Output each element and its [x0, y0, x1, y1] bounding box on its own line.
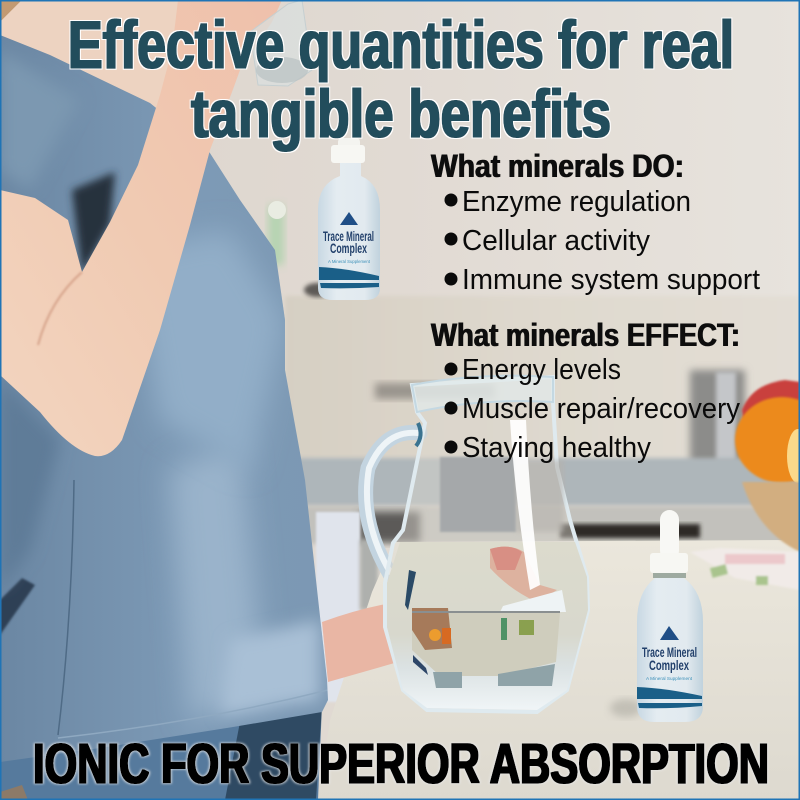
folded cloth on the counter	[690, 548, 800, 590]
pitcher water	[387, 542, 588, 710]
title: tangible benefits	[191, 76, 611, 152]
list: minerals effect: Staying healthy	[462, 432, 651, 464]
product bottle: bottom: A Mineral Supplement	[646, 676, 693, 681]
logo	[660, 626, 679, 640]
list: minerals do: Cellular activity	[462, 225, 650, 257]
product name	[323, 229, 374, 256]
glass water pitcher	[366, 376, 588, 712]
woman: elbow crease	[38, 272, 82, 345]
fruit basket with oranges	[735, 380, 800, 552]
pitcher rim	[412, 376, 553, 412]
text block: what minerals do	[431, 148, 760, 296]
shirt: shading and highlights	[0, 50, 328, 738]
product name: Complex	[649, 657, 689, 673]
pitcher highlight	[510, 420, 540, 590]
dropper	[660, 510, 679, 560]
woman: blue t-shirt	[0, 0, 340, 770]
list: minerals do: Enzyme regulation	[462, 186, 691, 218]
product bottle: bottom	[610, 510, 703, 722]
list: minerals effect: Muscle repair/recovery	[462, 393, 740, 425]
product bottle: top: A Mineral Supplement	[328, 259, 371, 264]
product name: Trace Mineral	[323, 229, 374, 244]
list: minerals effect: Energy levels	[462, 354, 621, 386]
dropper	[338, 138, 360, 152]
pitcher handle	[366, 432, 420, 574]
woman: hand resting on the counter	[322, 604, 398, 682]
refraction of the kitchen	[405, 547, 566, 688]
list: minerals do	[444, 186, 760, 296]
product name	[642, 644, 697, 673]
woman: neck and chest	[0, 0, 200, 108]
woman: hair at top left	[0, 0, 22, 22]
title	[68, 7, 734, 152]
product name: Complex	[330, 241, 367, 256]
bottle body	[637, 578, 703, 722]
label waves	[319, 267, 379, 280]
heading: what minerals do: What minerals DO:	[431, 148, 684, 184]
list: minerals do: Immune system support	[462, 264, 760, 296]
pitcher glass body	[385, 377, 588, 712]
woman: jeans	[0, 705, 322, 800]
drinking glass	[250, 0, 312, 86]
pitcher handle joint	[416, 423, 421, 446]
counter top	[318, 540, 800, 800]
list: minerals effect	[444, 354, 740, 464]
bottle body	[318, 163, 380, 300]
text block: what minerals effect	[431, 317, 740, 464]
label waves	[637, 687, 702, 699]
woman: raised arm and hand	[0, 0, 282, 456]
product bottle: top	[304, 138, 380, 300]
pitcher condensation panel	[440, 457, 516, 532]
heading: what minerals effect: What minerals EFFECT:	[431, 317, 740, 353]
logo	[340, 212, 358, 225]
product name: Trace Mineral	[642, 644, 697, 660]
